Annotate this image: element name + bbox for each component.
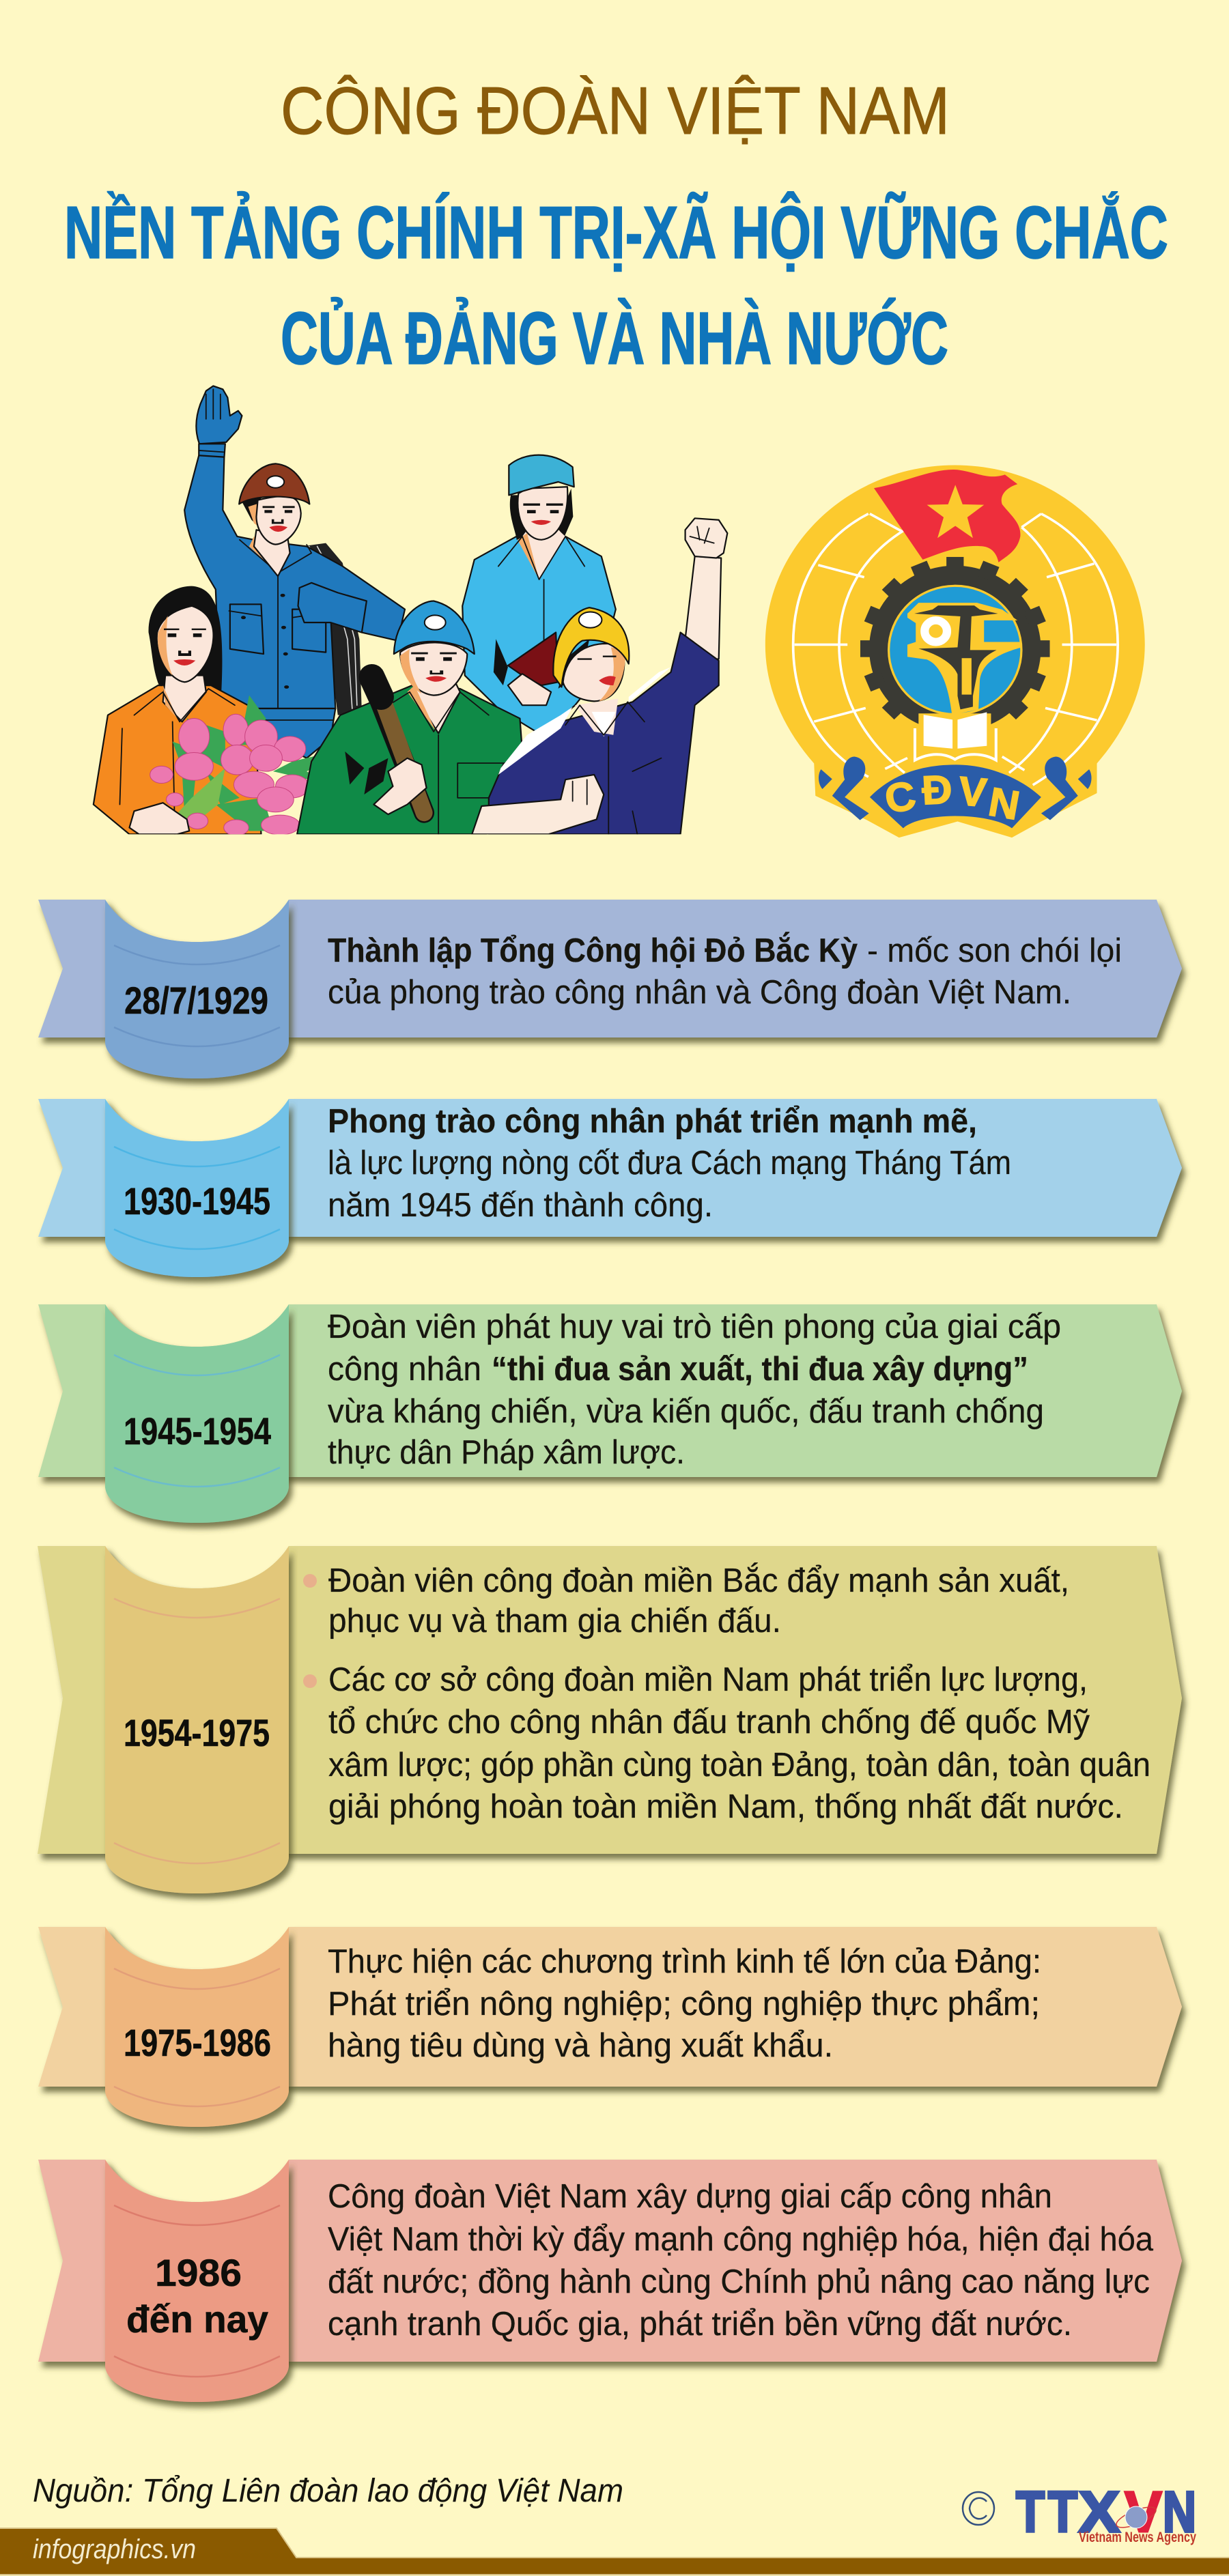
flag with star xyxy=(874,470,1020,562)
ribbon xyxy=(38,1927,1182,2087)
description: Thực hiện các chương trình kinh tế lớn của Đảng: xyxy=(328,1943,1041,1980)
website: infographics.vn xyxy=(33,2534,196,2564)
logo: TTXVN: X xyxy=(1079,2480,1120,2544)
description: “thi đua sản xuất, thi đua xây dựng” xyxy=(492,1351,1028,1388)
description: hàng tiêu dùng và hàng xuất khẩu. xyxy=(328,2027,833,2064)
description: Việt Nam thời kỳ đẩy mạnh công nghiệp hóa, hiện đại hóa xyxy=(328,2221,1154,2258)
panel: 1930-1945 xyxy=(38,1099,1182,1277)
description: cạnh tranh Quốc gia, phát triển bền vững đất nước. xyxy=(328,2306,1072,2343)
ribbon banner with CĐVN: CĐVN xyxy=(881,766,1023,829)
description: giải phóng hoàn toàn miền Nam, thống nhất đất nước. xyxy=(328,1788,1123,1825)
figure: woman in orange with flowers xyxy=(93,586,314,834)
logo: TTXVN: T xyxy=(1048,2480,1077,2544)
copyright icon xyxy=(963,2492,994,2525)
heading: CỦA ĐẢNG VÀ NHÀ NƯỚC xyxy=(281,297,948,380)
emblem: Công đoàn Việt Nam logo xyxy=(765,466,1145,838)
ribbon xyxy=(38,1304,1182,1477)
figure: worker in navy with yellow helmet, raised fist xyxy=(472,518,727,834)
description: Phong trào công nhân phát triển mạnh mẽ, xyxy=(328,1103,977,1140)
source note: Nguồn: Tổng Liên đoàn lao động Việt Nam xyxy=(33,2473,623,2509)
description: tổ chức cho công nhân đấu tranh chống đế quốc Mỹ xyxy=(328,1704,1090,1741)
description: đất nước; đồng hành cùng Chính phủ nâng cao năng lực xyxy=(328,2263,1150,2300)
open book xyxy=(915,712,996,760)
illustration: group of workers xyxy=(94,386,727,835)
date tab xyxy=(105,2160,289,2402)
bullets xyxy=(303,1574,317,1688)
panel: 28/7/1929 xyxy=(38,900,1182,1078)
globe lines xyxy=(793,514,1118,785)
date tab: 1954-1975 xyxy=(124,1711,270,1754)
description: là lực lượng nòng cốt đưa Cách mạng Tháng Tám xyxy=(328,1145,1011,1182)
description xyxy=(328,1308,1061,1471)
description xyxy=(328,1103,1011,1224)
emblem base xyxy=(765,466,1145,838)
gear xyxy=(860,557,1050,722)
description: Phát triển nông nghiệp; công nghiệp thực phẩm; xyxy=(328,1986,1040,2022)
figure: miner in dark blue with raised glove xyxy=(184,386,405,758)
date tab: đến nay xyxy=(126,2298,268,2341)
description: Các cơ sở công đoàn miền Nam phát triển lực lượng, xyxy=(328,1661,1088,1698)
figure: soldier in green with tool xyxy=(297,601,522,834)
gear centre: map, hammer and wrench xyxy=(889,586,1021,715)
description: Thành lập Tổng Công hội Đỏ Bắc Kỳ xyxy=(328,932,858,969)
date tab xyxy=(105,900,289,1078)
logo: TTXVN: V xyxy=(1125,2480,1162,2544)
description: Đoàn viên công đoàn miền Bắc đẩy mạnh sản xuất, xyxy=(328,1562,1069,1599)
ribbon xyxy=(38,1546,1182,1854)
logo: TTXVN xyxy=(1016,2480,1196,2545)
figure: light blue shirt woman xyxy=(462,455,616,735)
description xyxy=(328,1943,1041,2064)
date tab xyxy=(105,1927,289,2127)
description: phục vụ và tham gia chiến đấu. xyxy=(328,1603,781,1640)
description: năm 1945 đến thành công. xyxy=(328,1187,713,1224)
logo: TTXVN: Vietnam News Agency xyxy=(1079,2530,1196,2545)
description: xâm lược; góp phần cùng toàn Đảng, toàn dân, toàn quân xyxy=(328,1747,1150,1784)
footer bar xyxy=(0,2528,1229,2575)
description: thực dân Pháp xâm lược. xyxy=(328,1434,685,1471)
logo: TTXVN: N xyxy=(1163,2480,1196,2544)
description xyxy=(328,932,1122,1011)
ribbon xyxy=(38,2160,1182,2362)
panel: 1986 đến nay xyxy=(38,2160,1182,2402)
ribbon xyxy=(38,900,1182,1037)
description: - mốc son chói lọi xyxy=(867,932,1122,969)
description: Đoàn viên phát huy vai trò tiên phong của giai cấp xyxy=(328,1308,1061,1345)
panel: 1954-1975 xyxy=(38,1546,1182,1893)
panel: 1945-1954 xyxy=(38,1304,1182,1523)
logo: TTXVN: T xyxy=(1016,2480,1045,2544)
date tab: 1986 xyxy=(155,2251,242,2294)
heading xyxy=(64,191,1168,380)
description xyxy=(328,1562,1150,1825)
description: của phong trào công nhân và Công đoàn Việt Nam. xyxy=(328,974,1071,1011)
ribbon banner with CĐVN xyxy=(819,757,1092,829)
date tab xyxy=(105,1304,289,1523)
description xyxy=(328,2178,1154,2343)
date tab: 1975-1986 xyxy=(124,2021,271,2064)
date tab xyxy=(105,1546,289,1893)
ribbon xyxy=(38,1099,1182,1237)
title: Công đoàn Việt Nam: CÔNG ĐOÀN VIỆT NAM xyxy=(281,73,950,148)
description: vừa kháng chiến, vừa kiến quốc, đấu tranh chống xyxy=(328,1393,1044,1430)
date tab: 1930-1945 xyxy=(124,1179,270,1222)
panel: 1975-1986 xyxy=(38,1927,1182,2127)
description: Công đoàn Việt Nam xây dựng giai cấp công nhân xyxy=(328,2178,1052,2215)
date tab: 28/7/1929 xyxy=(124,979,268,1022)
description: công nhân xyxy=(328,1351,481,1388)
date tab xyxy=(105,1099,289,1277)
date tab: 1945-1954 xyxy=(124,1409,271,1452)
